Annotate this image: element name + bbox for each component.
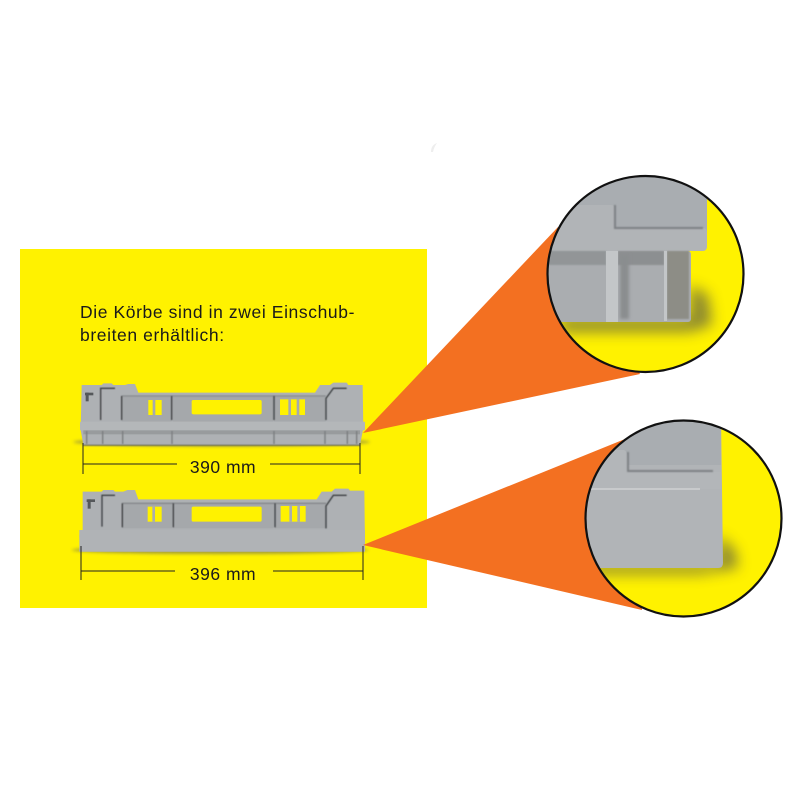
intro text: Die Körbe sind in zwei Einschub- bbox=[80, 302, 355, 322]
magnifier circle top bbox=[546, 174, 745, 374]
small white mark bbox=[431, 143, 437, 152]
dimension 390 mm bbox=[83, 443, 360, 477]
dimension 396 mm bbox=[81, 546, 363, 584]
basket 396 mm bbox=[72, 489, 368, 554]
dimension 390 mm: 390 mm bbox=[190, 457, 256, 477]
intro text: breiten erhältlich: bbox=[80, 325, 225, 345]
orange zoom wedge top bbox=[363, 227, 640, 433]
basket 390 mm bbox=[73, 383, 370, 446]
dimension 396 mm: 396 mm bbox=[190, 564, 256, 584]
yellow panel bbox=[20, 249, 427, 608]
orange zoom wedge bottom bbox=[363, 439, 642, 610]
magnifier circle bottom bbox=[584, 419, 783, 618]
intro text bbox=[80, 302, 355, 345]
